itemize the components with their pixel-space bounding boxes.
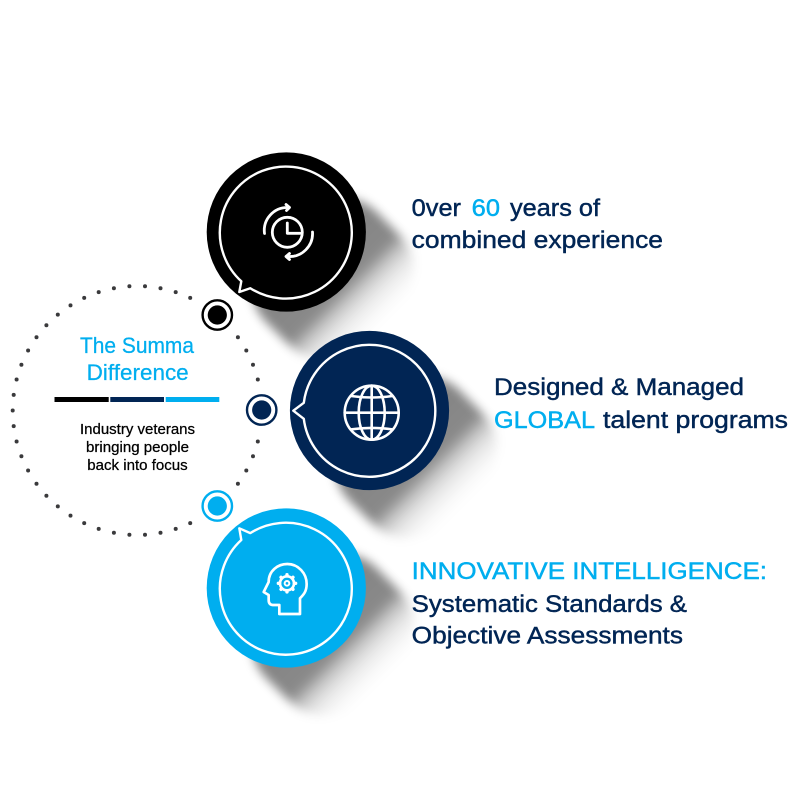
icon: clock with cycle arrows: [264, 204, 313, 260]
text: global programs: GLOBAL: [494, 407, 595, 434]
panel: navy circle: [290, 331, 449, 490]
panel: blue circle: [207, 508, 366, 668]
node: navy: [247, 395, 276, 425]
text: innovative intelligence: INNOVATIVE INTELLIGENCE:: [412, 558, 767, 585]
heading: The Summa Difference: [80, 333, 195, 385]
divider bars: [54, 397, 219, 402]
speech ring: [293, 345, 435, 477]
text: global programs: [494, 374, 788, 434]
icon: head with gear: [264, 564, 307, 614]
text: innovative intelligence: [412, 558, 767, 650]
text: experience: [412, 195, 663, 254]
text: experience: 60: [472, 195, 500, 222]
text: experience: years of: [510, 195, 600, 222]
tagline: bringing people: [86, 440, 189, 456]
dotted ring: [11, 284, 260, 537]
icon: globe: [345, 386, 399, 440]
node: blue: [203, 491, 232, 521]
text: experience: 0ver: [412, 195, 461, 222]
shadow: blue circle: [231, 533, 435, 736]
tagline: Industry veterans: [80, 422, 195, 438]
panel: black circle: [207, 152, 366, 312]
text: innovative intelligence: Objective Assessments: [412, 622, 683, 650]
heading: The Summa Difference: The Summa: [80, 333, 195, 358]
shadow: black circle: [231, 177, 435, 380]
tagline: [80, 422, 195, 474]
shadow: navy circle: [314, 355, 518, 559]
speech ring: [220, 167, 352, 299]
node: black: [203, 300, 232, 330]
tagline: back into focus: [87, 458, 188, 474]
text: innovative intelligence: Systematic Standards &: [412, 591, 687, 618]
text: experience: combined experience: [412, 227, 663, 254]
heading: The Summa Difference: Difference: [87, 360, 189, 385]
text: global programs: Designed & Managed: [494, 374, 744, 401]
speech ring: [220, 523, 352, 655]
text: global programs: talent programs: [603, 407, 788, 434]
